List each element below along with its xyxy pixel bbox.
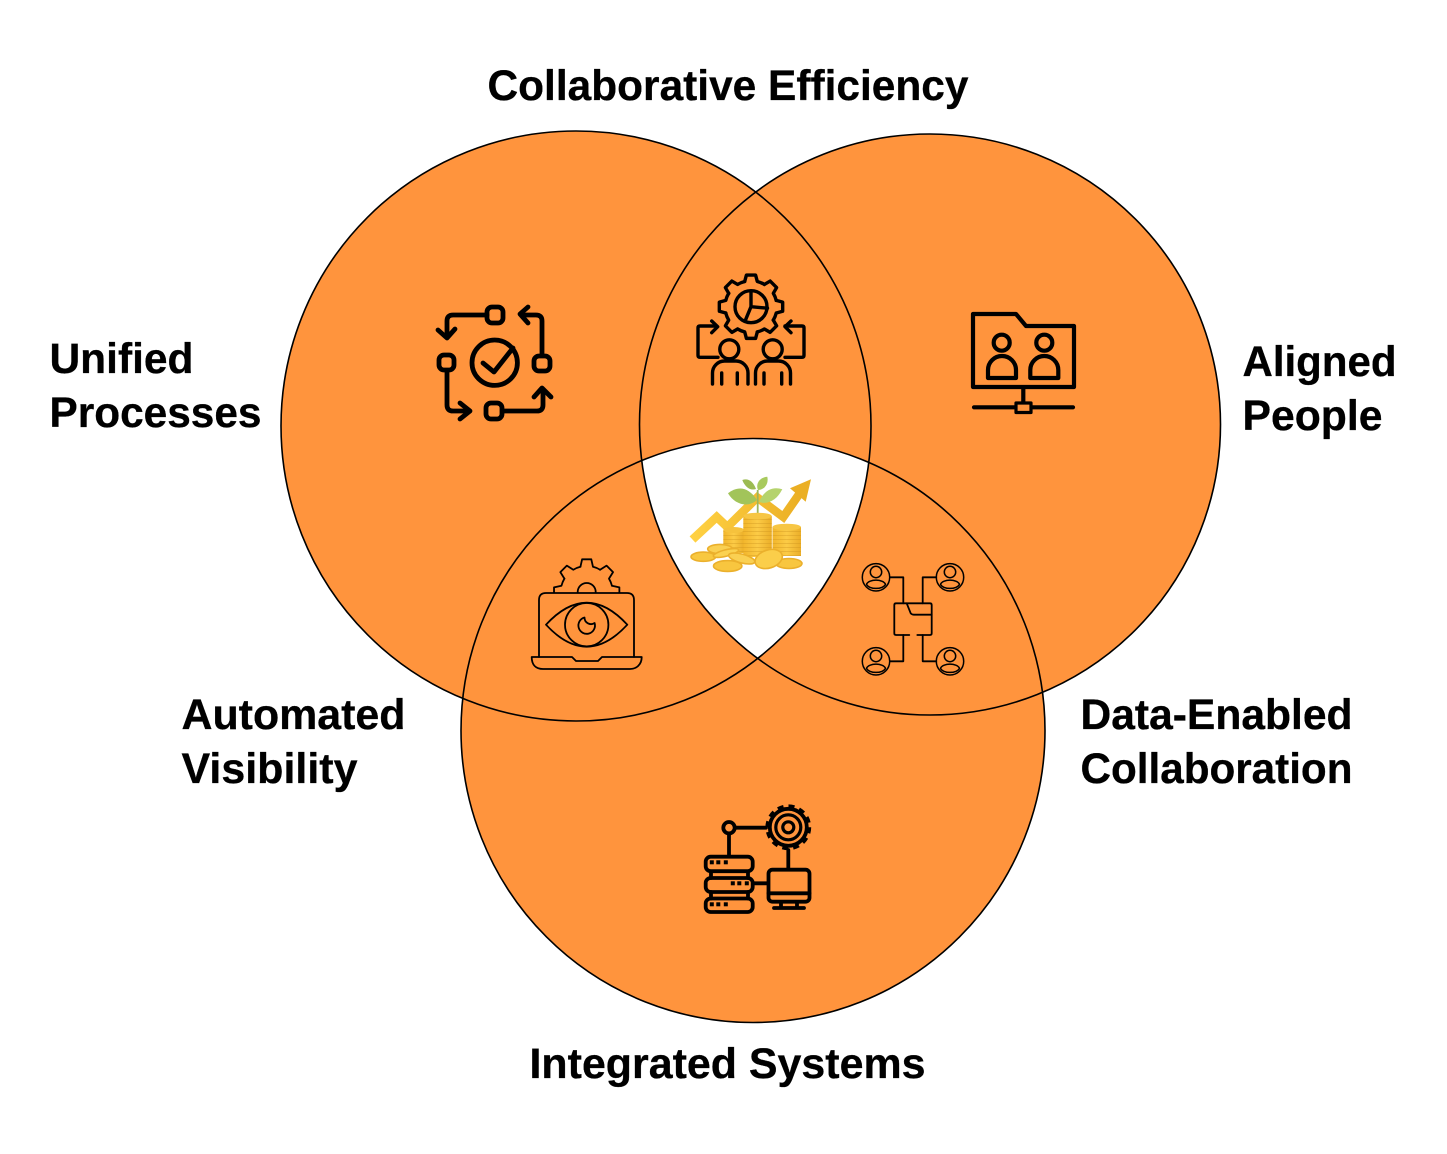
circle: integrated systems [461,439,1045,1023]
icon: coins with growth arrow and plant [691,477,811,572]
label: data-enabled collaboration: Collaboration [1080,746,1352,793]
heading: collaborative efficiency: Collaborative Efficiency [488,63,969,110]
loose coins [691,544,802,572]
circle: unified processes [281,131,871,721]
circle outlines [281,131,1220,1022]
icon: people folder on network [973,314,1074,412]
label: aligned people [1242,339,1396,440]
icon: automated visibility laptop with eye [532,559,642,669]
growth arrow [692,479,811,540]
center intersection [642,439,868,658]
circle: aligned people [640,134,1220,715]
icon: gear with pie chart and team [698,275,804,384]
icon: integrated systems servers gear monitor [706,806,810,912]
venn diagram [281,131,1220,1023]
icon: unified processes cycle with check [438,307,551,419]
label: aligned people: People [1242,393,1382,440]
label: data-enabled collaboration: Data-Enabled [1080,692,1352,739]
label: automated visibility: Visibility [182,746,358,793]
label: unified processes [50,336,262,437]
plant [728,477,782,516]
coin stacks [723,513,801,557]
label: automated visibility [182,692,406,793]
label: data-enabled collaboration [1080,692,1352,793]
label: unified processes: Processes [50,390,262,437]
label: unified processes: Unified [50,336,194,383]
label: aligned people: Aligned [1242,339,1396,386]
icon: data-enabled collaboration network [862,564,964,675]
label: automated visibility: Automated [182,692,406,739]
label: integrated systems: Integrated Systems [530,1041,926,1088]
